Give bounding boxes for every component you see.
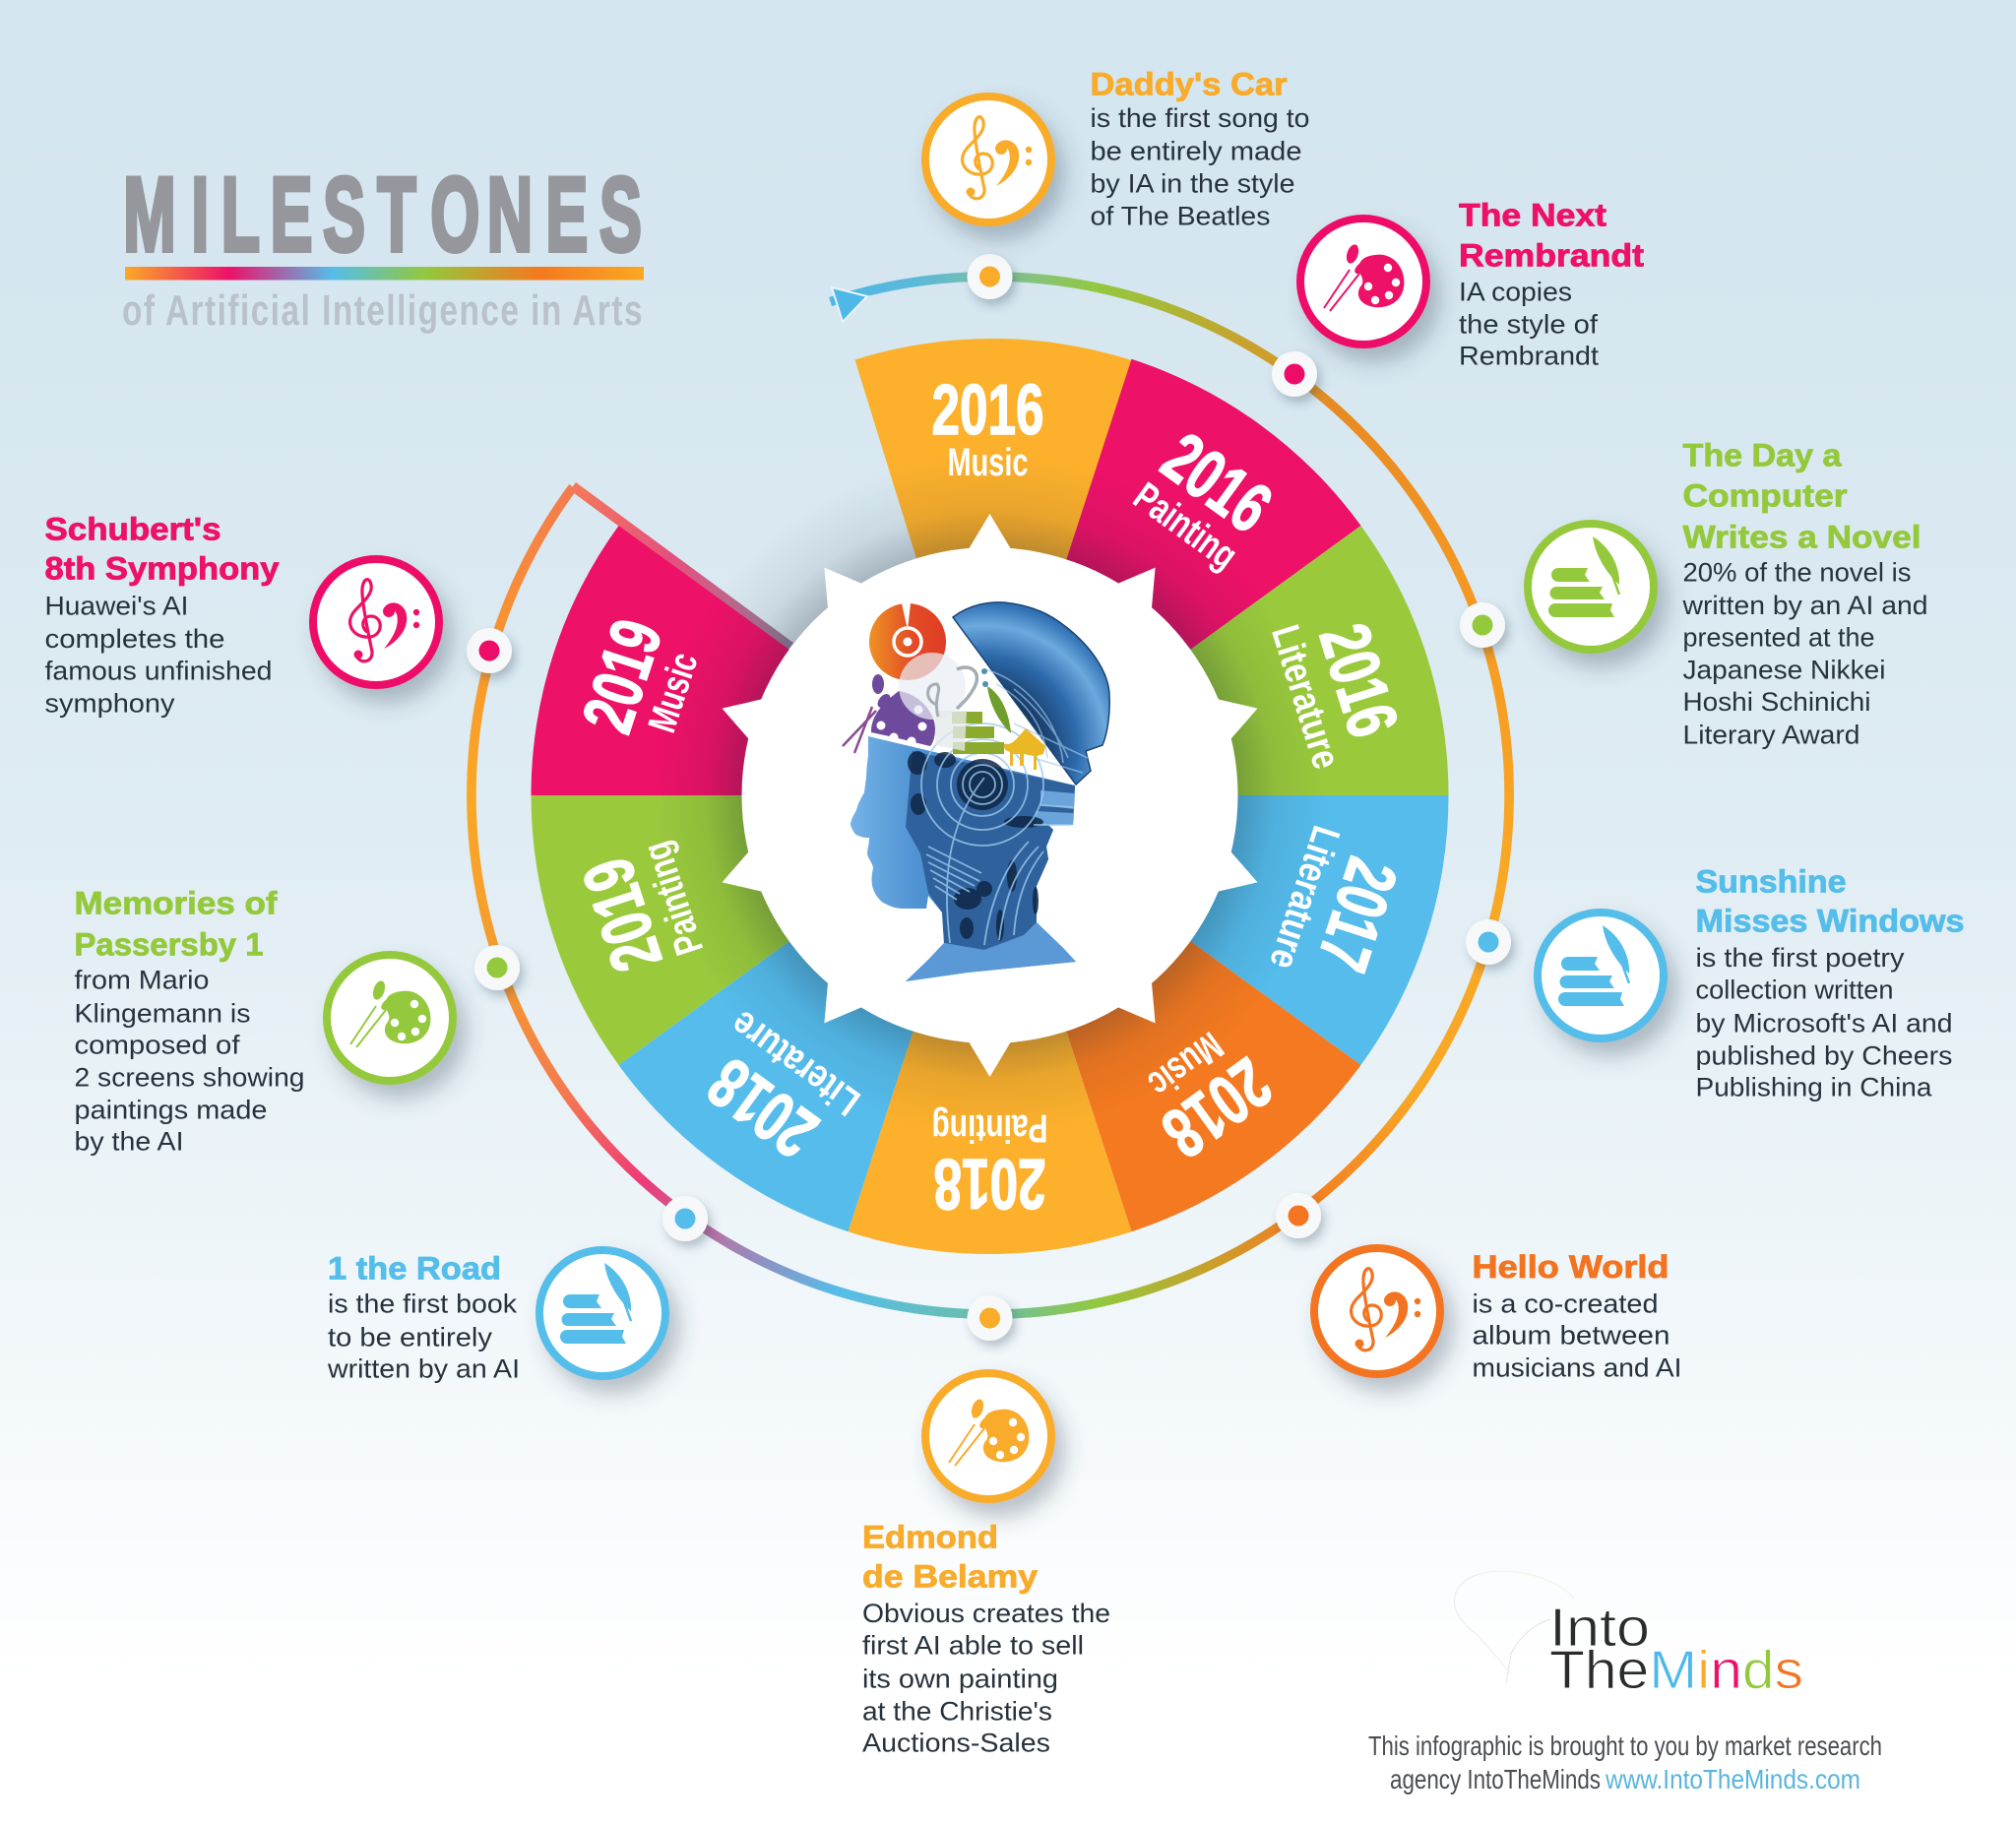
label: 2019 Painting: 2019 [568,849,677,980]
text: 1 the Road: to be entirely [328,1323,493,1352]
text: Sunshine Misses Windows: is the first poetry [1695,943,1905,973]
label: 2016 Music: Music [947,441,1028,484]
text: The Day a Computer Writes a Novel: Computer [1683,478,1847,514]
text: Sunshine Misses Windows: by Microsoft's AI and [1695,1008,1953,1038]
segment: 2016 music [854,339,1132,795]
label: 2019 Painting: Painting [635,837,712,960]
logo: IntoTheMinds [1455,1571,1803,1700]
central head illustration [843,602,1109,981]
segment: 2016 literature [990,526,1449,795]
text: Sunshine Misses Windows: Publishing in China [1695,1073,1933,1102]
label: 2016 Painting: 2016 [1148,418,1286,548]
art: piano [1004,728,1045,770]
central white gear [715,514,1265,1077]
label: 2017 Literature: Literature [1261,821,1348,975]
label: 2016 Literature: Literature [1263,620,1349,774]
dot: yellow 2018 [967,1295,1012,1341]
text: The Day a Computer Writes a Novel: 20% of the novel is [1683,557,1912,587]
text: 1 the Road: written by an AI [327,1354,520,1384]
text: Edmond de Belamy: Edmond [862,1520,998,1555]
text: Sunshine Misses Windows: collection written [1695,975,1894,1004]
head: shoulder [906,922,1076,981]
label: 2018 Music: 2018 [1148,1042,1286,1172]
dot: green 2019 [474,945,520,990]
art: quill [987,686,1011,733]
text: Edmond de Belamy: Obvious creates the [862,1599,1110,1628]
logo: IntoTheMinds: TheMinds [1549,1639,1803,1700]
text: Memories of Passersby 1: from Mario [75,965,209,994]
footer credit: This infographic is brought to you by market research [1368,1730,1882,1761]
text: Memories of Passersby 1: Passersby 1 [75,927,264,963]
text: The Next Rembrandt [1459,197,1644,370]
text: Schubert's 8th Symphony: Schubert's [45,512,220,547]
head: skull cap [953,602,1109,785]
timeline arrow head [832,287,867,322]
text: The Next Rembrandt: IA copies [1459,278,1572,307]
label: 2019 Music [568,610,712,753]
label: 2017 Literature [1261,821,1418,997]
label: 2016 Music: 2016 [931,371,1043,450]
text: Daddy's Car [1091,67,1309,230]
text: Hello World: album between [1473,1321,1670,1351]
text: Memories of Passersby 1: Klingemann is [75,998,250,1028]
text: Schubert's 8th Symphony: Huawei's AI [45,591,189,620]
label: 2019 Painting [567,837,712,982]
text: Schubert's 8th Symphony [45,512,280,719]
art: light bulb with clefs [899,653,988,751]
head: collar blocks [1036,790,1075,825]
label: 2018 Painting [931,1106,1047,1223]
text: The Day a Computer Writes a Novel: The Day a [1683,437,1842,472]
text: Edmond de Belamy [862,1520,1110,1758]
text: The Next Rembrandt: the style of [1459,309,1599,339]
icon: palette pink [1300,219,1426,345]
segment: 2018 music [990,795,1360,1231]
text: Sunshine Misses Windows: published by Cheers [1695,1041,1953,1071]
segment labels [567,371,1418,1223]
text: 1 the Road: 1 the Road [328,1250,501,1286]
text: Schubert's 8th Symphony: famous unfinished [45,656,272,685]
text: Memories of Passersby 1: 2 screens showing [75,1063,305,1093]
wheel of year segments [532,339,1449,1254]
text: Edmond de Belamy: first AI able to sell [862,1630,1084,1660]
text: Sunshine Misses Windows: Misses Windows [1695,904,1965,939]
segment: 2018 painting [849,795,1132,1254]
title: MILESTONES: MILESTONES [123,155,642,274]
segment: 2019 music [532,526,990,795]
label: 2018 Painting: Painting [931,1106,1047,1150]
dot: yellow 2016 [967,254,1012,299]
label: 2018 Literature: Literature [723,1002,868,1124]
text: The Day a Computer Writes a Novel [1681,437,1927,750]
text: The Next Rembrandt: Rembrandt [1459,341,1600,370]
text: Edmond de Belamy: at the Christie's [862,1697,1052,1727]
label: 2016 Literature: 2016 [1304,615,1413,746]
dot: green 2016 [1460,602,1505,648]
text: Edmond de Belamy: Auctions-Sales [862,1729,1050,1758]
text: Hello World: musicians and AI [1473,1352,1681,1382]
timeline dots [467,254,1511,1341]
art: books [952,712,1004,754]
footer credit: www.IntoTheMinds.com [1605,1764,1860,1794]
text: 1 the Road [327,1250,520,1384]
label: 2018 Music [1127,1014,1286,1172]
label: 2016 Painting: Painting [1126,474,1245,578]
footer credit: agency IntoTheMinds [1390,1764,1601,1794]
icon: palette green [327,955,453,1081]
text: The Day a Computer Writes a Novel: written by an AI and [1681,591,1927,620]
text: Daddy's Car: is the first song to [1091,103,1309,133]
label: 2016 Literature [1263,598,1418,774]
text: Hello World: Hello World [1473,1249,1670,1285]
icon: music clefs orange [1314,1248,1440,1374]
text: Schubert's 8th Symphony: symphony [45,689,175,719]
label: 2019 Music: Music [640,648,707,737]
timeline tail line [573,486,790,647]
text: Memories of Passersby 1: paintings made [75,1095,268,1124]
text: 1 the Road: is the first book [328,1289,518,1319]
text: The Day a Computer Writes a Novel: presented at the [1683,622,1874,652]
text: Sunshine Misses Windows: Sunshine [1695,864,1847,900]
icon: books blue [539,1250,665,1376]
text: Hello World [1473,1249,1681,1382]
dot: blue 2018 [662,1196,708,1241]
segment: 2019 painting [532,795,990,1065]
label: 2018 Painting: 2018 [933,1144,1045,1223]
dot: pink 2016 [1272,351,1317,397]
text: Daddy's Car: be entirely made [1091,136,1301,165]
label: 2016 Painting [1126,417,1287,578]
dot: orange 2018 [1276,1193,1321,1238]
text: Sunshine Misses Windows [1695,864,1965,1102]
segment: 2016 painting [990,359,1360,795]
segment: 2017 literature [990,795,1449,1065]
dot: pink 2019 [467,628,512,673]
timeline ring [467,272,1514,1319]
art: compact disc [869,603,946,680]
footer credit [1368,1730,1882,1794]
inner shading around hub [650,456,1329,1135]
icon: books green [1528,524,1654,650]
text: Daddy's Car: Daddy's Car [1091,67,1288,102]
text: Daddy's Car: of The Beatles [1091,201,1270,230]
text: Memories of Passersby 1: composed of [75,1030,240,1059]
text: Schubert's 8th Symphony: completes the [45,624,225,654]
label: 2019 Music: 2019 [568,610,677,741]
label: 2017 Literature: 2017 [1302,849,1412,980]
icon: music clefs yellow [925,96,1051,222]
text: Hello World: is a co-created [1473,1289,1658,1319]
text: Memories of Passersby 1 [75,886,305,1156]
dot: blue 2017 [1466,919,1511,965]
rainbow bar [125,267,644,280]
text: Memories of Passersby 1: by the AI [75,1126,183,1156]
text: The Next Rembrandt: The Next [1459,197,1606,232]
head: machine interior [906,751,1075,950]
subtitle: of Artificial Intelligence in Arts [122,286,644,335]
logo: IntoTheMinds: Into [1549,1597,1650,1658]
label: 2018 Literature: 2018 [694,1042,832,1172]
text: The Day a Computer Writes a Novel: Hoshi Schinichi [1683,687,1870,717]
art: palette [843,674,935,753]
text: The Day a Computer Writes a Novel: Writes a Novel [1683,520,1922,555]
text: The Next Rembrandt: Rembrandt [1459,238,1644,274]
text: Schubert's 8th Symphony: 8th Symphony [45,551,280,587]
label: 2018 Literature [680,1002,868,1183]
text: Daddy's Car: by IA in the style [1091,169,1295,199]
text: The Day a Computer Writes a Novel: Literary Award [1683,721,1860,750]
title: MILESTONES [122,155,644,335]
text: Memories of Passersby 1: Memories of [75,886,278,921]
icon: palette yellow [925,1373,1051,1499]
text: The Day a Computer Writes a Novel: Japanese Nikkei [1683,656,1886,685]
text: Edmond de Belamy: de Belamy [862,1559,1038,1595]
text: Edmond de Belamy: its own painting [862,1664,1058,1693]
segment: 2018 literature [618,795,990,1231]
icon: books blue [1538,912,1664,1038]
head: lower face and neck [850,736,1076,981]
label: 2018 Music: Music [1140,1024,1230,1105]
icon: music clefs pink [313,559,439,685]
label: 2016 Music [931,371,1043,484]
